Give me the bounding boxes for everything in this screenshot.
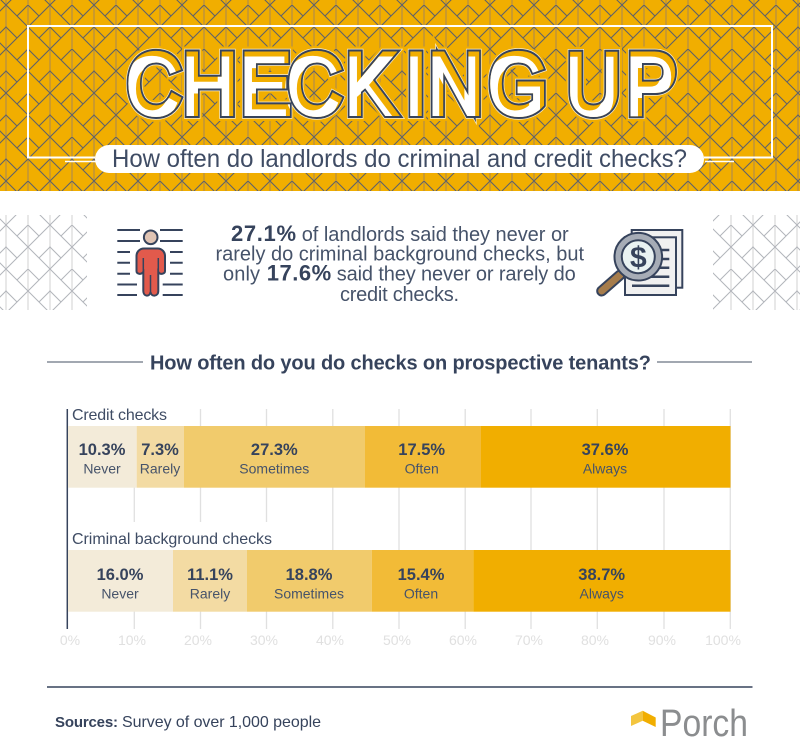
sources note: Survey of over 1,000 people	[122, 714, 321, 731]
axis tick labels: 70%	[515, 632, 543, 648]
intro text block: only	[223, 264, 260, 286]
bar: credit checks: Rarely	[140, 460, 180, 476]
axis tick labels: 40%	[316, 632, 344, 648]
bar: credit checks: Credit checks	[72, 407, 167, 424]
intro text block	[216, 221, 584, 306]
bar: criminal background checks: 16.0%	[97, 566, 144, 584]
bar: credit checks: Often	[405, 460, 439, 476]
title: CHECKING UP	[123, 42, 673, 138]
header frame	[28, 26, 772, 158]
axis tick labels: 10%	[118, 632, 146, 648]
axis line	[66, 409, 68, 629]
axis tick labels: 90%	[648, 632, 676, 648]
icon: magnifying glass over documents	[602, 230, 682, 295]
footer rule	[47, 686, 752, 688]
bar: criminal background checks: Never	[101, 585, 139, 601]
intro text block: 17.6%	[267, 261, 331, 286]
icon: magnifying glass over documents: $	[630, 242, 647, 274]
bar: criminal background checks: 11.1%	[187, 566, 233, 584]
sources note: Sources:	[55, 714, 118, 731]
chart heading: How often do you do checks on prospective tenants?	[150, 352, 651, 374]
bar: criminal background checks: Always	[580, 585, 624, 601]
bar: criminal background checks: 38.7%	[578, 566, 625, 584]
bar: credit checks: 27.3%	[251, 441, 298, 459]
bar: credit checks: Sometimes	[239, 460, 309, 476]
axis tick labels: 20%	[184, 632, 212, 648]
bar: credit checks: Never	[83, 460, 121, 476]
axis tick labels: 80%	[581, 632, 609, 648]
stacked bar chart	[60, 405, 741, 648]
right decorative pattern panel	[713, 215, 800, 310]
title: CHECKING UP	[127, 37, 677, 133]
intro text block: 27.1%	[231, 221, 296, 246]
bar: criminal background checks	[68, 531, 730, 612]
axis tick labels: 60%	[449, 632, 477, 648]
bar: credit checks	[68, 407, 730, 488]
bar: criminal background checks: Often	[404, 585, 438, 601]
left decorative pattern panel	[0, 215, 87, 310]
title: CHECKING UP	[127, 37, 677, 133]
intro text block: of landlords said they never or	[302, 224, 569, 246]
axis tick labels: 0%	[60, 632, 80, 648]
title: CHECKING UP	[127, 37, 677, 133]
subtitle pill: How often do landlords do criminal and credit checks?	[112, 145, 687, 173]
bar: credit checks: 17.5%	[398, 441, 445, 459]
bar: criminal background checks: Sometimes	[274, 585, 344, 601]
bar: criminal background checks: Rarely	[190, 585, 230, 601]
intro text block: credit checks.	[340, 284, 459, 306]
header banner	[0, 0, 800, 191]
bar: credit checks: 7.3%	[141, 441, 179, 459]
bar: credit checks: Always	[583, 460, 627, 476]
axis tick labels	[60, 632, 741, 648]
bar: criminal background checks: 18.8%	[286, 566, 333, 584]
axis tick labels: 100%	[705, 632, 741, 648]
bar: credit checks: 10.3%	[79, 441, 126, 459]
axis tick labels: 30%	[250, 632, 278, 648]
bar: criminal background checks: 15.4%	[398, 566, 445, 584]
Porch logo: Porch	[660, 703, 748, 745]
bar: credit checks: 37.6%	[582, 441, 629, 459]
intro text block: said they never or rarely do	[337, 264, 576, 286]
Porch logo	[631, 703, 748, 745]
intro text block: rarely do criminal background checks, but	[216, 244, 584, 266]
title: CHECKING UP	[127, 37, 677, 133]
icon: person in lineup	[117, 230, 183, 296]
axis tick labels: 50%	[383, 632, 411, 648]
bar: criminal background checks: Criminal background checks	[72, 531, 272, 548]
